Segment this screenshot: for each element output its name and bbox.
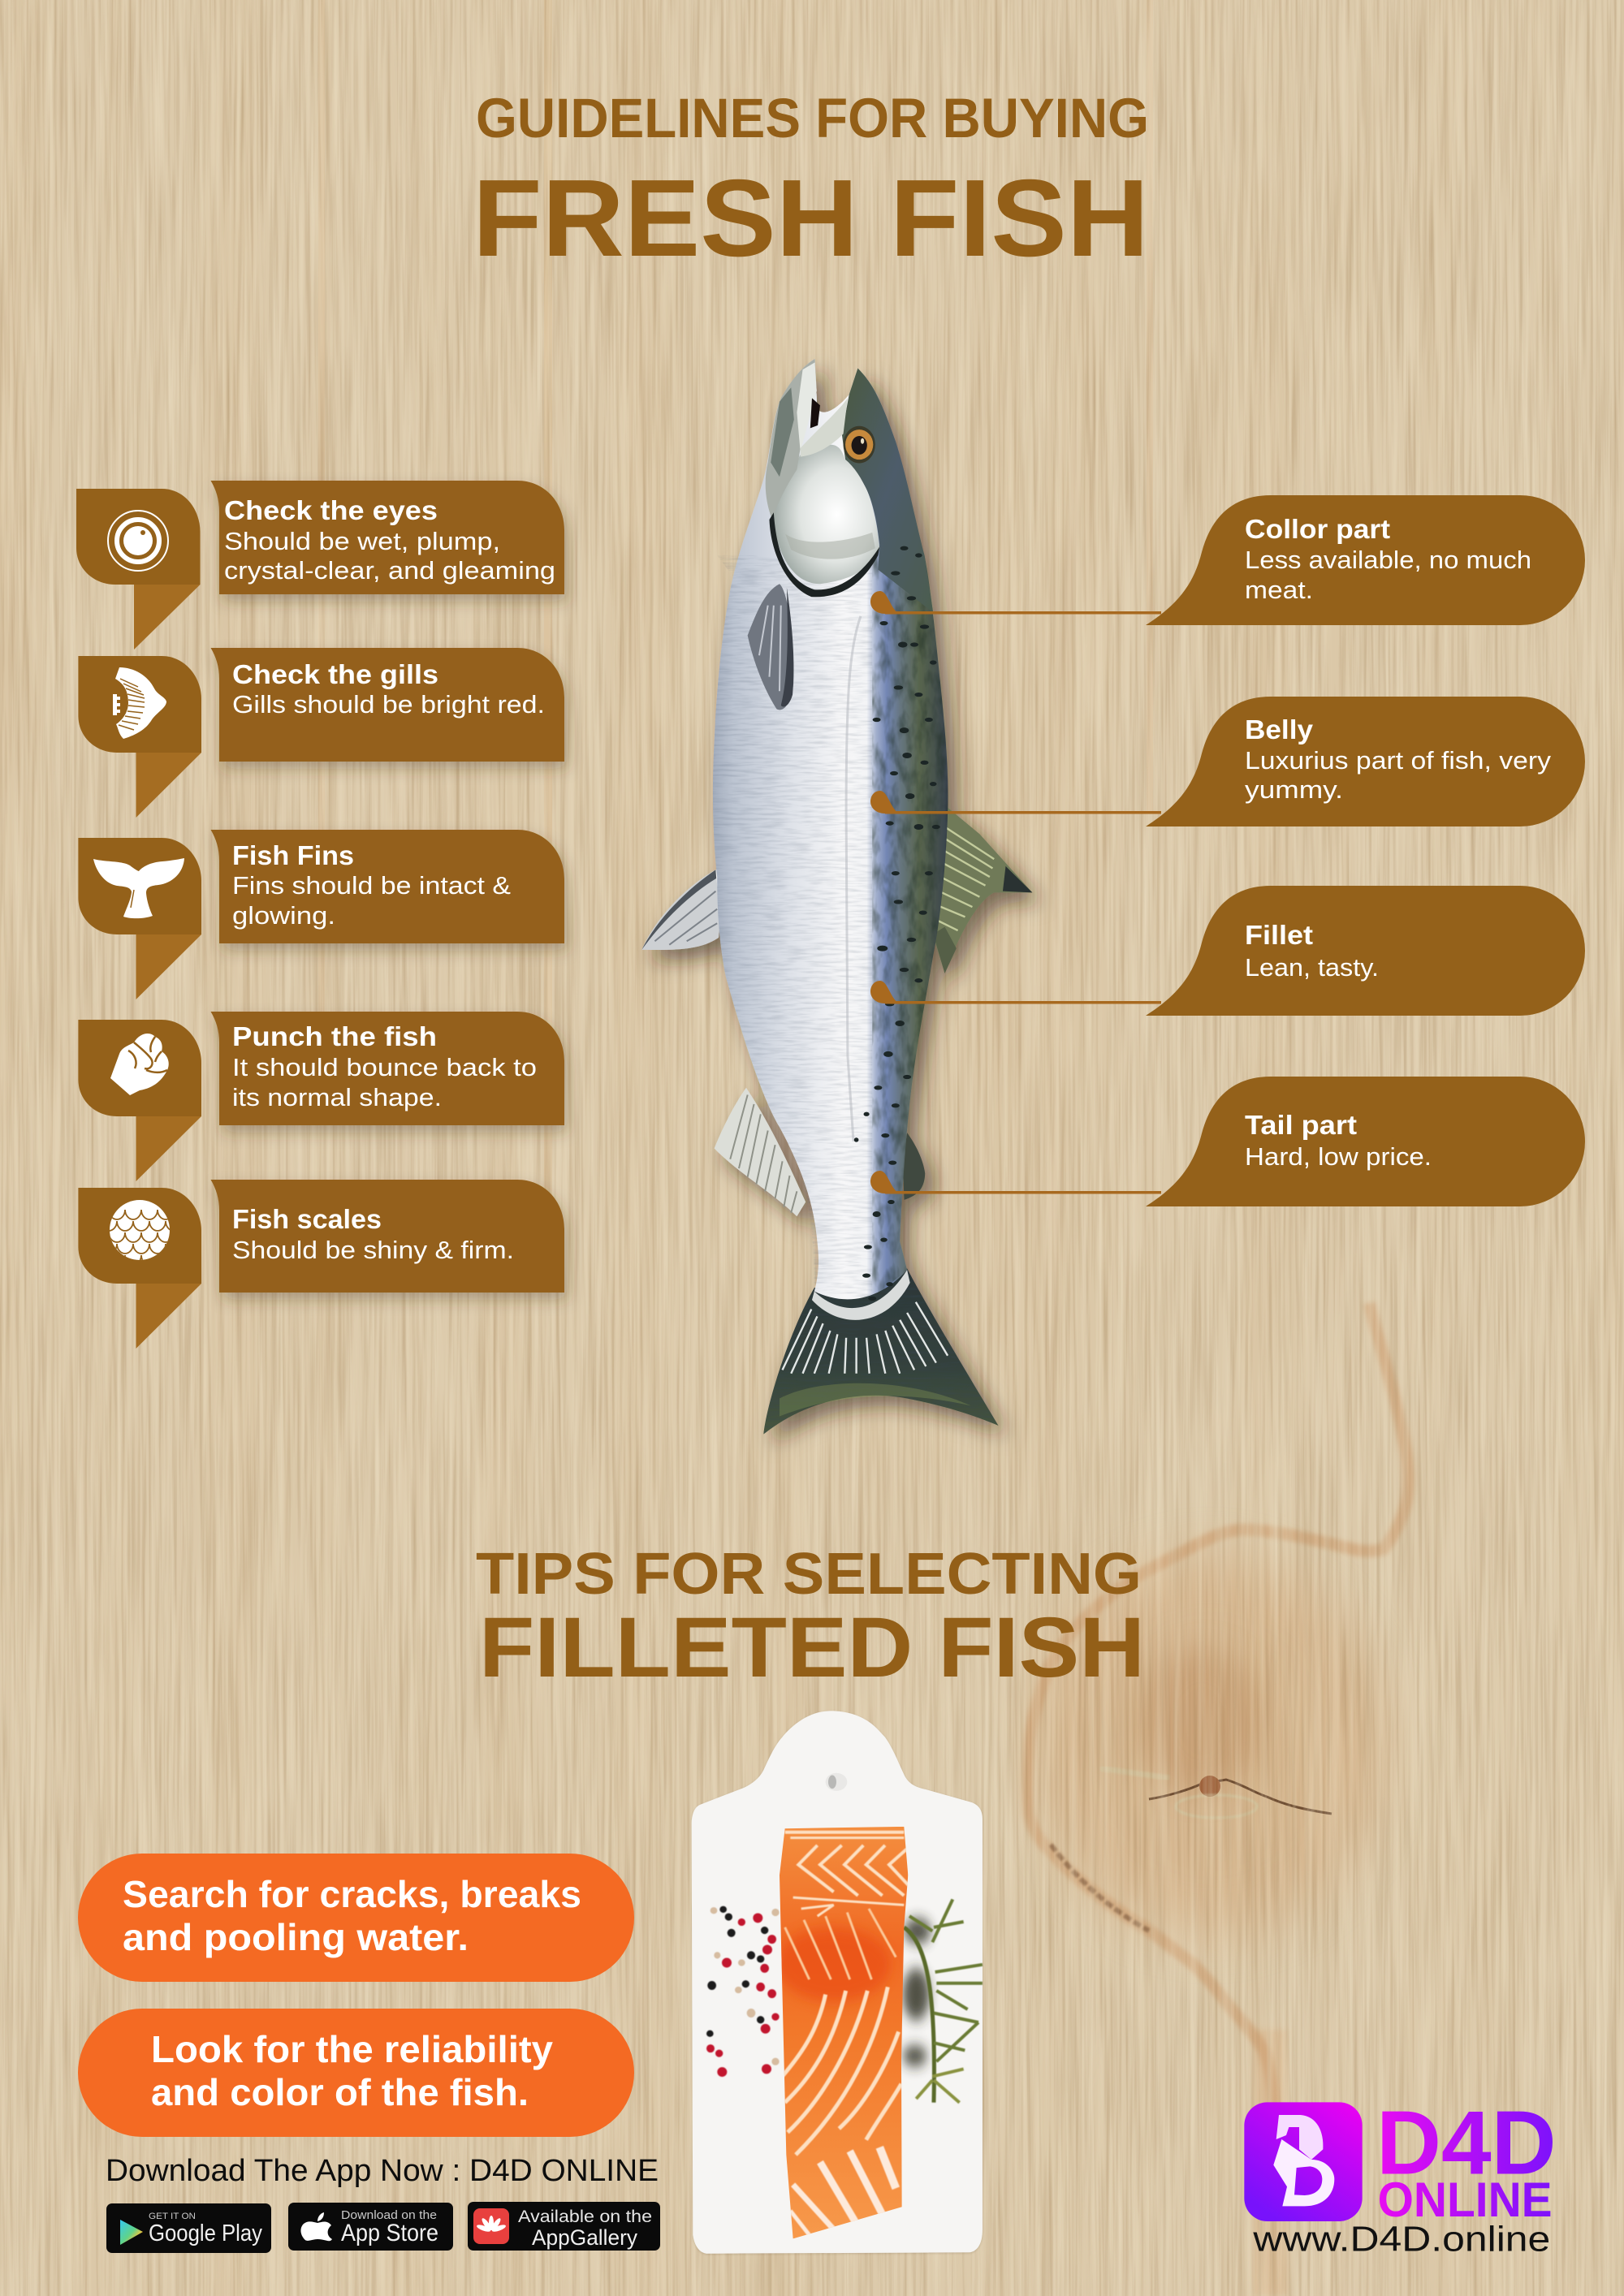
item: fish fins: Fins should be intact & — [232, 871, 511, 900]
badge: google play: Google Play — [149, 2220, 262, 2246]
item: check the gills: Gills should be bright red. — [232, 690, 545, 719]
logo icon — [1244, 2102, 1363, 2221]
tip pill: cracks: and pooling water. — [123, 1916, 469, 1958]
lower jaw — [766, 359, 817, 520]
lateral line — [846, 616, 861, 1142]
badge: app store: App Store — [341, 2220, 438, 2246]
item: fish scales: Should be shiny & firm. — [232, 1236, 514, 1264]
item: fish fins: glowing. — [232, 901, 335, 930]
body brush texture — [713, 555, 872, 1298]
item: check the eyes: Check the eyes — [224, 495, 438, 525]
label: tail part: Tail part — [1245, 1110, 1357, 1140]
item: punch the fish: its normal shape. — [232, 1083, 442, 1111]
label: fillet: Lean, tasty. — [1245, 953, 1379, 982]
rosemary — [904, 1899, 983, 2103]
tip pill: reliability: Look for the reliability — [151, 2028, 553, 2070]
badge: app gallery — [468, 2202, 660, 2251]
fish back head — [842, 368, 933, 612]
item: fish scales — [78, 1180, 564, 1349]
right dorsal fin — [933, 804, 1032, 973]
back mottling — [872, 555, 948, 1298]
peppercorns — [706, 1906, 780, 2077]
salmon fillet — [780, 1827, 908, 2239]
cutting board — [692, 1711, 983, 2254]
label: belly: yummy. — [1245, 775, 1343, 804]
label: collar part — [870, 495, 1585, 625]
tip pill: cracks: Search for cracks, breaks — [123, 1873, 581, 1915]
icon: eye — [108, 511, 168, 571]
download text: Download The App Now : D4D ONLINE — [106, 2154, 659, 2188]
label: tail part: Hard, low price. — [1245, 1142, 1432, 1171]
panel: left checklist — [76, 481, 564, 1349]
label: fillet — [870, 886, 1585, 1016]
item: check the eyes — [76, 481, 564, 650]
label: tail part — [870, 1077, 1585, 1206]
heading: tips for selecting filleted fish: TIPS FOR SELECTING — [476, 1542, 1142, 1607]
title: guidelines for buying fresh fish: GUIDELINES FOR BUYING — [476, 87, 1149, 149]
fish body — [713, 359, 948, 1299]
fish eye — [844, 426, 875, 463]
badge: google play — [106, 2203, 271, 2253]
logo url: www.D4D.online — [1252, 2220, 1550, 2259]
logo wordmark: D4D — [1376, 2091, 1557, 2193]
label: collar part: meat. — [1245, 576, 1313, 604]
logo: D4D online: ONLINE — [1378, 2172, 1553, 2227]
item: punch the fish — [78, 1012, 564, 1181]
left pectoral fin — [641, 870, 725, 950]
label: belly — [870, 697, 1585, 826]
label: belly: Belly — [1245, 714, 1314, 744]
rosemary shadow — [903, 1918, 931, 2066]
item: fish scales: Fish scales — [232, 1204, 382, 1234]
tip pill: reliability — [78, 2009, 634, 2137]
badge: app store — [288, 2203, 453, 2251]
tail root — [812, 1270, 910, 1320]
item: check the eyes: Should be wet, plump, — [224, 527, 500, 555]
adipose fin — [903, 1133, 925, 1200]
illustration: whole salmon — [641, 359, 1032, 1435]
label: collar part: Less available, no much — [1245, 546, 1531, 574]
heading: tips for selecting filleted fish: FILLETED FISH — [479, 1600, 1145, 1695]
item: check the gills: Check the gills — [232, 659, 438, 689]
title: guidelines for buying fresh fish: FRESH FISH — [473, 157, 1149, 279]
tip pill: reliability: and color of the fish. — [151, 2071, 529, 2113]
fish cheek — [772, 445, 879, 584]
pectoral fin — [748, 584, 793, 710]
label: belly: Luxurius part of fish, very — [1245, 746, 1552, 775]
label: collar part: Collor part — [1245, 514, 1390, 544]
illustration: salmon fillet on cutting board — [692, 1711, 983, 2254]
fish spots — [854, 546, 940, 1301]
icon: gills — [113, 667, 166, 739]
badge: app gallery: AppGallery — [532, 2225, 637, 2250]
badge: app store: Download on the — [341, 2208, 437, 2222]
item: punch the fish: Punch the fish — [232, 1021, 437, 1051]
label: fillet: Fillet — [1245, 920, 1313, 950]
badge: google play: GET IT ON — [149, 2212, 196, 2221]
item: check the eyes: crystal-clear, and gleaming — [224, 556, 555, 585]
panel: fish part labels — [870, 495, 1585, 1206]
mouth — [810, 398, 820, 428]
item: fish fins: Fish Fins — [232, 840, 354, 870]
item: check the gills — [78, 648, 564, 818]
logo: D4D online — [1244, 2091, 1557, 2259]
gill cover line — [769, 512, 879, 597]
tail fin — [763, 1268, 999, 1435]
board hole — [826, 1773, 847, 1791]
wood knot — [1028, 1303, 1409, 2119]
icon: scales — [110, 1200, 170, 1260]
tip pill: cracks — [78, 1854, 634, 1982]
badge: app gallery: Available on the — [518, 2208, 652, 2226]
item: fish fins — [78, 830, 564, 999]
item: punch the fish: It should bounce back to — [232, 1053, 537, 1081]
icon: fish tail — [93, 858, 184, 918]
heading: tips for selecting filleted fish — [476, 1542, 1145, 1695]
title: guidelines for buying fresh fish — [473, 87, 1149, 279]
anal fin — [715, 1088, 806, 1216]
icon: fist — [110, 1034, 169, 1095]
